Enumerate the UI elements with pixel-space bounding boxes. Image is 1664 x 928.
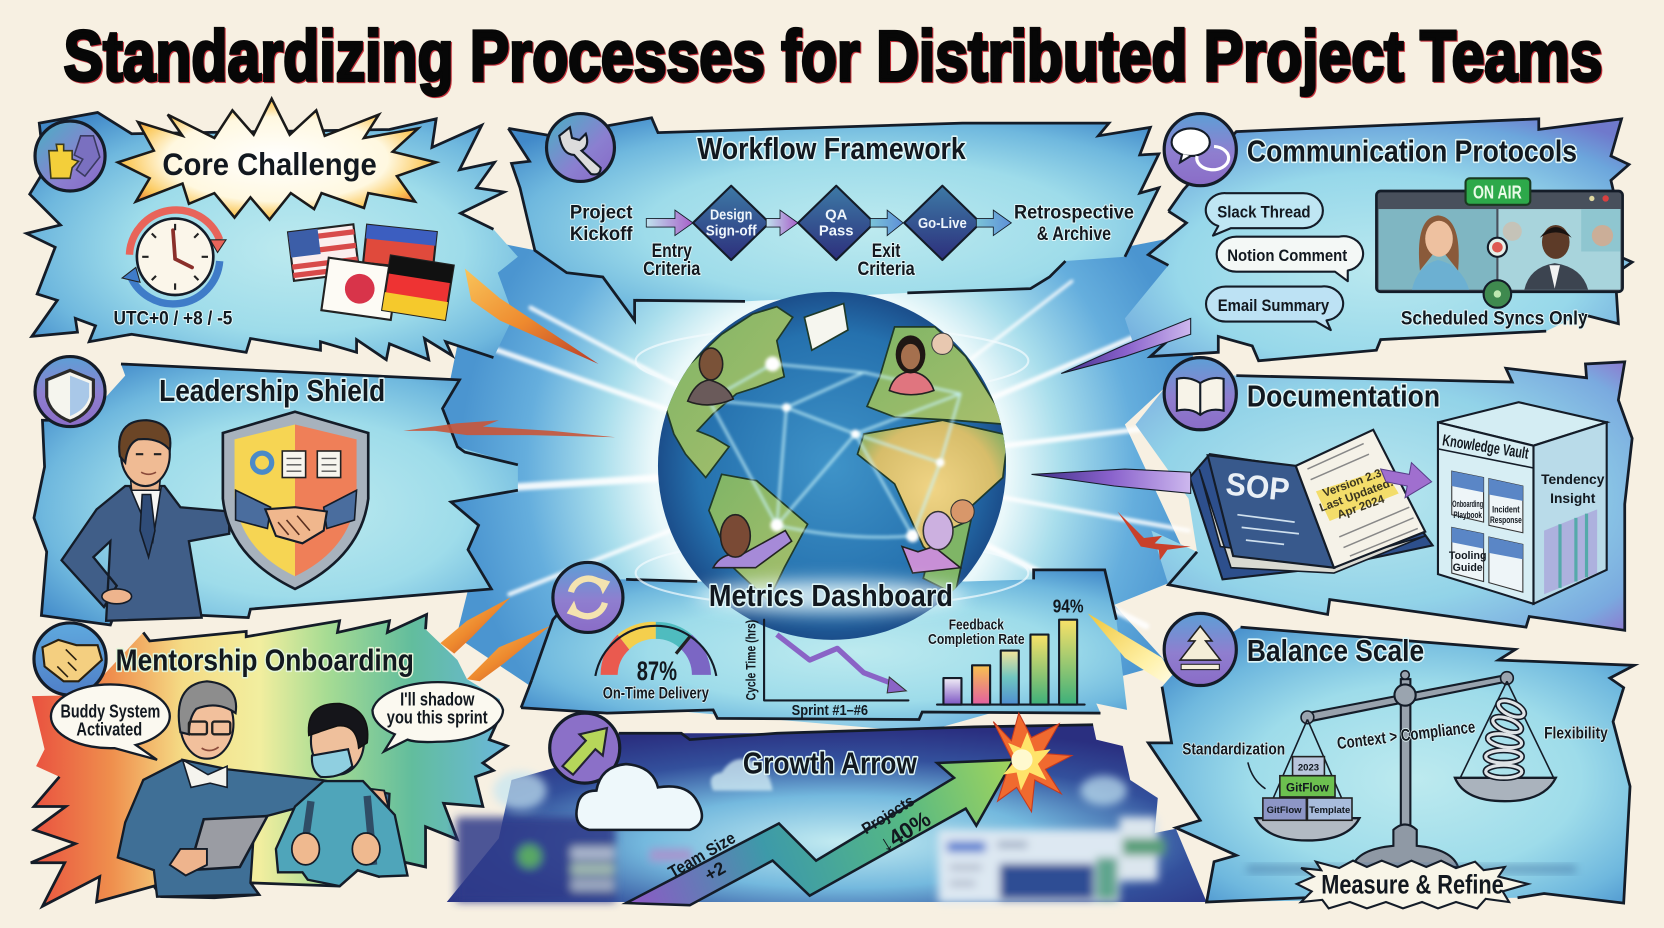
- panel: core challenge: [27, 99, 518, 360]
- heading: growth arrow: Growth Arrow: [743, 746, 917, 781]
- label: projects down forty percent: [859, 790, 935, 860]
- flare: leadership lightning: [403, 420, 616, 437]
- label: context over compliance: Context > Compliance: [1336, 717, 1476, 753]
- bubble: slack thread: [1206, 193, 1323, 236]
- illustration: faded cloud: [711, 759, 773, 791]
- icon: puzzle: [35, 121, 105, 191]
- label: exit criteria: Exit: [872, 241, 901, 262]
- chart: feedback completion bars: 94%: [1053, 596, 1084, 616]
- icon: chat bubbles: [1164, 114, 1236, 186]
- chart: cycle time line: Sprint #1–#6: [792, 703, 868, 719]
- illustration: knowledge vault: Onboarding: [1452, 499, 1483, 510]
- heading: workflow framework: Workflow Framework: [697, 131, 966, 166]
- spike: documentation purple: [1032, 469, 1191, 493]
- label: scheduled syncs only: Scheduled Syncs Only: [1401, 309, 1588, 330]
- panel: mentorship onboarding: [31, 614, 507, 906]
- label: flexibility: Flexibility: [1544, 724, 1608, 743]
- icon: growth arrow badge: [550, 713, 620, 783]
- illustration: knowledge vault: Incident: [1492, 505, 1520, 516]
- team member: top right: [889, 333, 953, 395]
- weights: standardization blocks: [1263, 757, 1352, 820]
- icon: clock with rotating arrows: [122, 210, 226, 304]
- arrow: go-live to retrospective: [976, 210, 1011, 236]
- heading: documentation: Documentation: [1247, 378, 1440, 413]
- label: team size plus two: [665, 828, 749, 900]
- heading: communication protocols: Communication Protocols: [1247, 133, 1577, 168]
- bubble: I'll shadow you this sprint: I'll shadow: [400, 690, 475, 710]
- flow: QA pass diamond: QA: [825, 208, 848, 224]
- panel: balance scale: [1148, 613, 1634, 908]
- icon: handshake badge: [34, 623, 106, 695]
- flow: project kickoff: Project: [570, 203, 633, 224]
- panel: leadership shield: [34, 357, 518, 625]
- flow: project kickoff: [570, 203, 633, 245]
- bubble: email summary: Email Summary: [1218, 296, 1330, 315]
- bubble: buddy system activated: Buddy System: [60, 701, 160, 721]
- label: standardization: [1182, 739, 1285, 788]
- chart: cycle time line: [744, 620, 908, 719]
- illustration: knowledge vault: Response: [1490, 515, 1522, 526]
- illustration: leader in suit: [62, 420, 229, 621]
- spike: comm purple: [1061, 318, 1191, 374]
- panel: metrics dashboard content: [553, 562, 1085, 719]
- burst: core challenge heading: Core Challenge: [162, 146, 377, 182]
- bubble: notion comment: [1217, 236, 1363, 281]
- icon: balance badge: [1164, 613, 1236, 686]
- badge: on air: ON AIR: [1473, 182, 1522, 202]
- bubble: I'll shadow you this sprint: [372, 682, 503, 751]
- illustration: SOP book: Version 2.3: [1321, 466, 1384, 500]
- flow: design sign-off diamond: Design: [710, 208, 752, 224]
- icon: refresh cycle: [553, 562, 623, 632]
- panel: communication protocols: [1125, 114, 1632, 361]
- weight: flexibility spring: [1486, 697, 1526, 778]
- arrow: kickoff to design: [646, 210, 693, 236]
- heading: balance scale: Balance Scale: [1247, 633, 1424, 668]
- gauge: on-time delivery: On-Time Delivery: [603, 683, 709, 702]
- illustration: SOP book: Apr 2024: [1335, 492, 1387, 522]
- illustration: knowledge vault: Knowledge Vault: [1441, 432, 1530, 463]
- flow: retrospective and archive: Retrospective: [1014, 203, 1134, 224]
- spike: balance yellow: [1088, 613, 1183, 695]
- illustration: SOP book: Last Updated:: [1318, 476, 1395, 515]
- label: team size plus two: +2: [701, 858, 729, 885]
- weights: standardization blocks: GitFlow: [1267, 805, 1302, 816]
- weights: standardization blocks: GitFlow: [1286, 782, 1330, 795]
- burst: core challenge heading: [118, 99, 436, 220]
- badge: on air: [1466, 178, 1530, 205]
- label: entry criteria: Criteria: [643, 259, 701, 280]
- illustration: mentee with mask and backpack: [276, 704, 408, 886]
- flow: retrospective and archive: & Archive: [1037, 224, 1111, 245]
- team member: top left: [688, 348, 733, 405]
- blurred dashboard background: [456, 771, 1165, 903]
- flow: go-live diamond: [904, 186, 981, 260]
- bubble: buddy system activated: Activated: [76, 719, 142, 739]
- icon: country flags: [288, 224, 454, 320]
- flow: design sign-off diamond: Sign-off: [706, 224, 757, 240]
- lightning: documentation red: [1117, 511, 1191, 560]
- burst: measure and refine: Measure & Refine: [1321, 870, 1504, 900]
- illustration: knowledge vault: Insight: [1550, 491, 1596, 506]
- globe with connected team: [636, 292, 1028, 640]
- bubble: buddy system activated: [51, 684, 170, 760]
- bubble: slack thread: Slack Thread: [1217, 203, 1311, 222]
- flow: design sign-off diamond: [693, 186, 769, 260]
- gauge: on-time delivery: [595, 622, 716, 702]
- flare: mentorship bottom: [467, 626, 550, 681]
- central energy blast background: [419, 239, 1194, 732]
- illustration: knowledge vault: [1438, 402, 1607, 604]
- bubble: I'll shadow you this sprint: you this sprint: [387, 708, 488, 728]
- label: time zones: UTC+0 / +8 / -5: [114, 309, 233, 330]
- team member: bottom left: [713, 515, 792, 568]
- flare: core orange: [465, 268, 599, 364]
- label: exit criteria: Criteria: [857, 259, 915, 280]
- flow: QA pass diamond: Pass: [819, 224, 854, 240]
- label: exit criteria: [857, 241, 915, 280]
- gauge: on-time delivery: 87%: [637, 656, 677, 686]
- weights: standardization blocks: 2023: [1298, 762, 1319, 773]
- chart: feedback completion bars: Feedback: [949, 617, 1005, 633]
- heading: leadership shield: Leadership Shield: [159, 373, 385, 408]
- arrow: QA to go-live: [870, 210, 903, 236]
- flare: mentorship top: [440, 597, 510, 654]
- label: standardization: Standardization: [1182, 739, 1285, 758]
- illustration: knowledge vault: Tooling: [1449, 550, 1486, 562]
- heading: mentorship onboarding: Mentorship Onboarding: [116, 643, 414, 678]
- chart: cycle time line: Cycle Time (hrs): [744, 620, 759, 700]
- arrow: design to QA: [766, 210, 798, 236]
- bubble: notion comment: Notion Comment: [1227, 246, 1348, 265]
- label: team size plus two: Team Size: [665, 828, 739, 882]
- chart: feedback completion bars: Completion Rate: [928, 632, 1025, 648]
- illustration: knowledge vault: Tendency: [1541, 472, 1605, 487]
- heading: metrics dashboard: Metrics Dashboard: [709, 578, 953, 613]
- illustration: knowledge vault: Guide: [1453, 562, 1483, 574]
- label: entry criteria: [643, 241, 701, 280]
- flares: colored impact spikes: [403, 268, 1191, 695]
- illustration: balance scale: [1255, 671, 1556, 867]
- team member: bottom right: [902, 500, 974, 573]
- video call window: [1376, 178, 1623, 308]
- label: entry criteria: Entry: [652, 241, 692, 262]
- icon: shield badge: [35, 357, 105, 427]
- illustration: knowledge vault: Playbook: [1453, 510, 1482, 521]
- label: projects down forty percent: ↓40%: [875, 806, 935, 857]
- burst: explosion at arrow tip: [993, 713, 1072, 812]
- icon: open book badge: [1164, 358, 1236, 430]
- chart: feedback completion bars: [928, 596, 1085, 705]
- label: projects down forty percent: Projects: [859, 793, 918, 838]
- illustration: mentor with tablet: [118, 681, 391, 897]
- flow: retrospective and archive: [1014, 203, 1134, 245]
- panel: workflow framework: [508, 114, 1159, 320]
- illustration: shield with handshake: [223, 412, 368, 589]
- burst: measure and refine: [1247, 861, 1576, 908]
- flow: QA pass diamond: [798, 186, 874, 260]
- flow: project kickoff: Kickoff: [570, 224, 633, 245]
- panel: metrics dashboard backing: [521, 570, 1127, 719]
- panel: documentation: [1136, 358, 1632, 630]
- illustration: SOP book: SOP: [1224, 465, 1291, 508]
- arrow: book to vault: [1381, 463, 1432, 498]
- icon: wrench: [547, 114, 614, 181]
- arrow: rising growth: [626, 760, 1013, 905]
- illustration: SOP book: [1190, 430, 1433, 579]
- bubble: email summary: [1206, 286, 1343, 330]
- illustration: large cloud: [576, 764, 702, 830]
- flow: go-live diamond: Go-Live: [918, 216, 967, 232]
- panel: growth arrow: [447, 713, 1207, 905]
- network links: [709, 364, 960, 537]
- weights: standardization blocks: Template: [1309, 805, 1350, 816]
